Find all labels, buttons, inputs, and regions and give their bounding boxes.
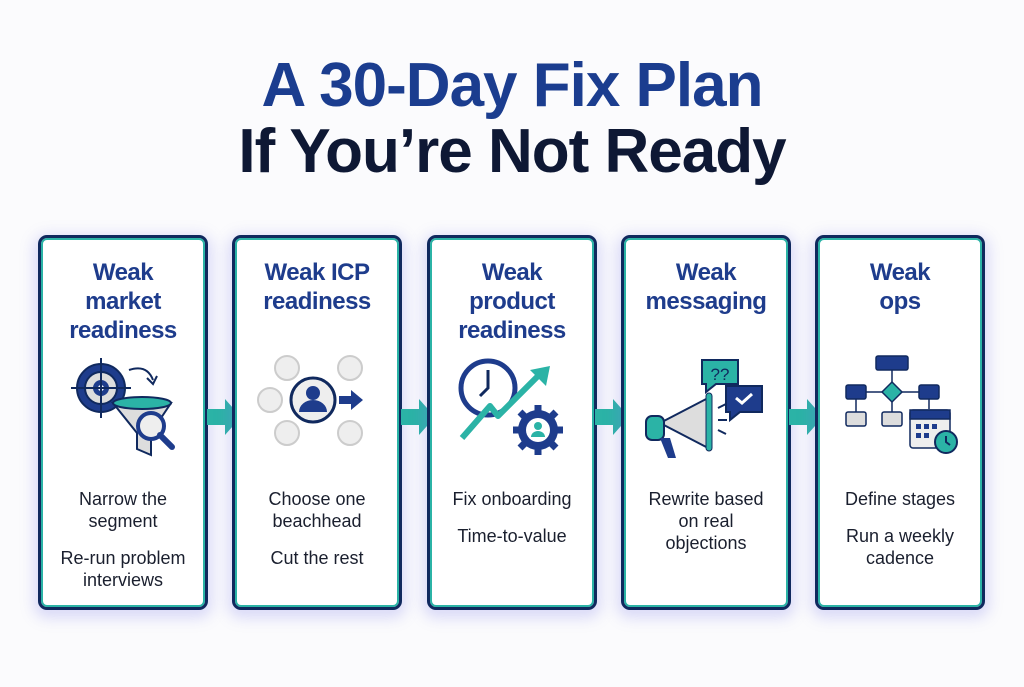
heading: Weak	[676, 259, 736, 286]
heading: readiness	[458, 317, 566, 344]
text	[846, 526, 954, 568]
text: Run a weekly	[846, 526, 954, 546]
icon: clock growth gear	[458, 358, 563, 455]
heading: Weak ICP	[265, 259, 369, 286]
text	[79, 489, 167, 531]
panel: weak ops	[815, 235, 985, 610]
arrow 4	[789, 399, 815, 435]
text: Fix onboarding	[452, 489, 572, 509]
heading: Weak	[482, 259, 542, 286]
icon: persons	[257, 355, 363, 446]
heading	[69, 259, 177, 344]
heading: Weak	[870, 259, 930, 286]
text: beachhead	[272, 511, 362, 531]
panel: weak market readiness	[38, 235, 208, 610]
icon: megaphone bubbles	[645, 359, 763, 458]
text: Cut the rest	[270, 548, 364, 568]
heading: messaging	[646, 288, 766, 315]
text: interviews	[83, 570, 163, 590]
text: cadence	[866, 548, 934, 568]
title line 2: If You’re Not Ready	[238, 117, 786, 186]
text	[268, 489, 366, 531]
panel: weak ICP readiness	[232, 235, 402, 610]
heading: ops	[879, 288, 921, 315]
icon: flowchart calendar	[845, 355, 958, 454]
text: segment	[88, 511, 158, 531]
text: on real	[678, 511, 734, 531]
heading: readiness	[263, 288, 371, 315]
text: Narrow the	[79, 489, 167, 509]
heading	[646, 259, 766, 315]
heading	[263, 259, 371, 315]
text: Time-to-value	[457, 526, 567, 546]
heading: readiness	[69, 317, 177, 344]
heading	[458, 259, 566, 344]
icon: megaphone bubbles: ??	[711, 365, 729, 384]
arrow 2	[401, 399, 427, 435]
heading	[870, 259, 930, 315]
text: Re-run problem	[60, 548, 186, 568]
text: Choose one	[268, 489, 366, 509]
arrow 1	[207, 399, 232, 435]
text	[60, 548, 186, 590]
text: objections	[665, 533, 747, 553]
panel: weak messaging	[621, 235, 791, 610]
heading: product	[469, 288, 555, 315]
arrow 3	[595, 399, 621, 435]
heading: Weak	[93, 259, 153, 286]
text: Define stages	[845, 489, 955, 509]
panel: weak product readiness	[427, 235, 597, 610]
text	[648, 489, 764, 553]
heading: market	[85, 288, 161, 315]
text: Rewrite based	[648, 489, 764, 509]
title line 1: A 30-Day Fix Plan	[261, 51, 762, 120]
icon: target funnel magnifier	[71, 358, 175, 456]
